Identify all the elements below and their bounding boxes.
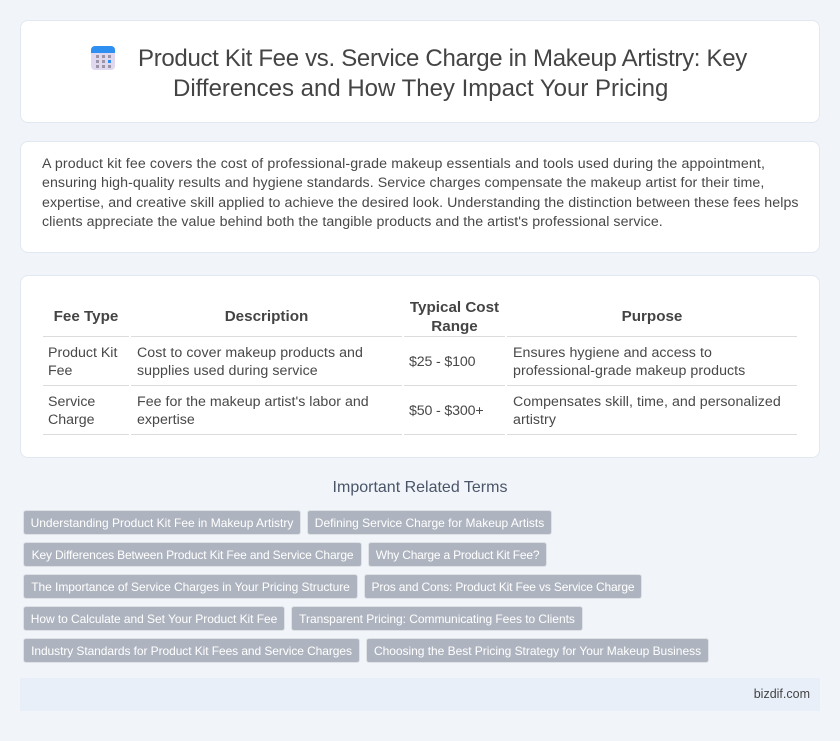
panel: header: [20, 20, 820, 123]
tag list: related terms: Key Differences Between Product Kit Fee and Service Charge: [32, 548, 353, 562]
table row: product kit fee: Cost to cover makeup products and: [137, 345, 363, 361]
text block: intro paragraph: [42, 156, 799, 230]
tag list: related terms: Why Charge a Product Kit Fee?: [376, 548, 539, 562]
tag list: related terms: Pros and Cons: Product Kit Fee vs Service Charge: [372, 580, 634, 594]
table row: service charge: [48, 394, 781, 428]
title: [138, 45, 748, 102]
title: Product Kit Fee vs. Service Charge in Makeup Artistry: Key: [138, 45, 747, 72]
table row: product kit fee: supplies used during service: [137, 363, 318, 379]
title: Differences and How They Impact Your Pricing: [173, 75, 668, 102]
table row: product kit fee: $25 - $100: [409, 354, 475, 370]
tag list: related terms: Choosing the Best Pricing Strategy for Your Makeup Business: [374, 644, 701, 658]
text block: intro paragraph: A product kit fee covers the cost of professional-grade makeup essentials and tools used during the appointment,: [42, 156, 765, 172]
table row: service charge: Compensates skill, time, and personalized: [513, 394, 781, 410]
table row: service charge: expertise: [137, 412, 195, 428]
table header: Purpose: [622, 308, 682, 325]
table header: Range: [431, 318, 478, 335]
table row: product kit fee: Fee: [48, 363, 72, 379]
tag list: related terms: [23, 510, 709, 663]
tag list: related terms: The Importance of Service Charges in Your Pricing Structure: [31, 580, 350, 594]
text block: intro paragraph: ensuring high-quality results and hygiene standards. Service charges compensate the makeup artist for their time,: [42, 175, 764, 191]
table row: product kit fee: professional-grade makeup products: [513, 363, 745, 379]
tag list: related terms: Industry Standards for Product Kit Fees and Service Charges: [31, 644, 352, 658]
icon: calendar: [91, 46, 115, 70]
table row: service charge: artistry: [513, 412, 556, 428]
text block: intro paragraph: clients appreciate the value behind both the tangible products and the artist's professional service.: [42, 214, 663, 230]
table row: product kit fee: Product Kit: [48, 345, 117, 361]
table header: Typical Cost: [410, 299, 499, 316]
table row: service charge: Service: [48, 394, 95, 410]
tag list: related terms: Understanding Product Kit Fee in Makeup Artistry: [31, 516, 293, 530]
footer text: bizdif.com: [754, 687, 810, 701]
panel: fee comparison table: [20, 275, 820, 458]
table row: service charge: $50 - $300+: [409, 403, 483, 419]
table row: service charge: Fee for the makeup artist's labor and: [137, 394, 369, 410]
table row: product kit fee: Ensures hygiene and access to: [513, 345, 712, 361]
table row: service charge: Charge: [48, 412, 95, 428]
table header: Fee Type: [54, 308, 118, 325]
tag list: related terms: How to Calculate and Set Your Product Kit Fee: [31, 612, 277, 626]
text block: intro paragraph: expertise, and creative skill applied to achieve the desired look. Understanding the distinction between these fees helps: [42, 195, 799, 211]
tag list: related terms: Transparent Pricing: Communicating Fees to Clients: [299, 612, 575, 626]
table header: Description: [225, 308, 308, 325]
panel: intro text: [20, 141, 820, 253]
heading: related terms: Important Related Terms: [333, 479, 507, 496]
table header: [54, 299, 682, 335]
footer: [20, 678, 820, 711]
table row: product kit fee: [48, 345, 745, 379]
tag list: related terms: Defining Service Charge for Makeup Artists: [315, 516, 544, 530]
